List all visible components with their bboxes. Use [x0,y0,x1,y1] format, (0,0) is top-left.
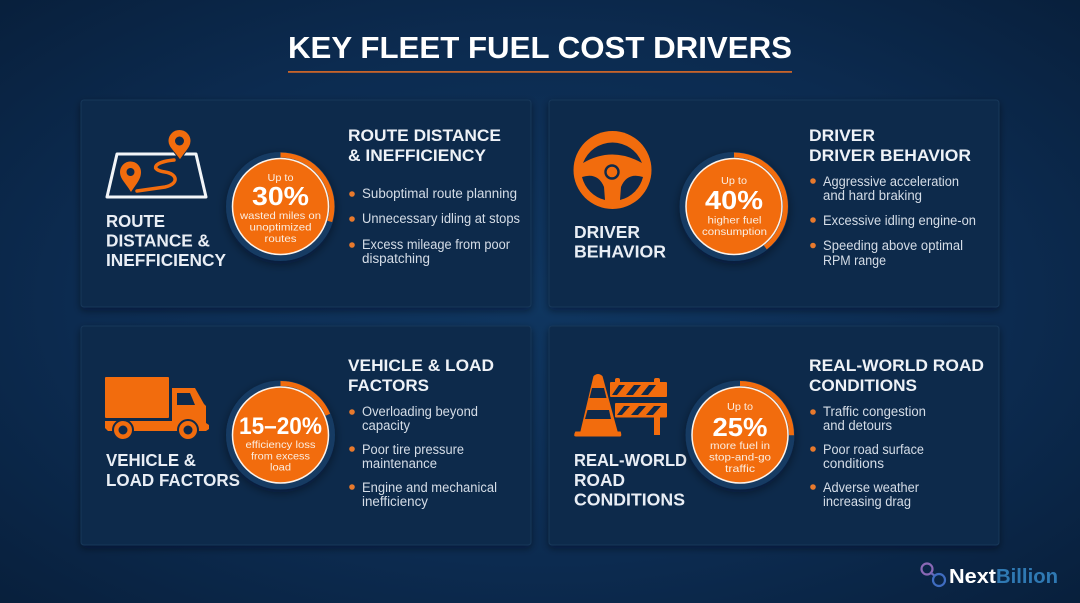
stat circle: 30% [226,152,335,261]
stat circle: 25%: 25% [712,412,768,442]
label: driver behavior: DRIVER [574,222,640,242]
bullet list: route distance: Excess mileage from poor [362,237,510,252]
icon: map with pins [107,130,206,197]
bullet list: driver behavior: Excessive idling engine-on [823,213,976,228]
heading: driver behavior: DRIVER [809,126,875,145]
bullet list: road conditions: Poor road surface [823,442,924,457]
label: road conditions: REAL-WORLD [574,450,687,470]
bullet list: driver behavior: Speeding above optimal [823,238,963,253]
panel: route distance [81,100,531,307]
logo: NextBillion: Next [949,566,996,588]
heading: road conditions: REAL-WORLD ROAD [809,356,984,375]
bullet list: route distance: dispatching [362,251,430,266]
bullet list: driver behavior: Aggressive acceleration [823,174,959,189]
stat circle: 15-20%: from excess [251,450,310,462]
panel: vehicle and load [81,326,531,545]
label: driver behavior [574,222,666,262]
label: route distance: DISTANCE & [106,230,210,250]
bullet list: vehicle and load: Poor tire pressure [362,442,464,457]
title underline [288,71,792,73]
heading: vehicle and load: FACTORS [348,376,429,395]
bullet list: road conditions: Traffic congestion [823,404,926,419]
stat circle: 15-20% [226,380,335,490]
heading: vehicle and load: VEHICLE & LOAD [348,356,494,375]
bullet list: route distance: Suboptimal route planning [362,186,517,201]
label: vehicle and load: VEHICLE & [106,450,196,470]
bullet list: route distance: Unnecessary idling at stops [362,211,520,226]
label: route distance: ROUTE [106,211,165,231]
icon: truck [105,377,209,440]
label: route distance: INEFFICIENCY [106,250,226,270]
label: road conditions [574,450,687,510]
bullet list: vehicle and load [349,404,497,509]
stat circle: 30%: Up to [268,172,294,184]
label: road conditions: CONDITIONS [574,490,685,510]
bullet list: driver behavior [810,174,976,268]
label: route distance [106,211,226,270]
logo: NextBillion: Billion [996,566,1058,588]
bullet list: road conditions: Adverse weather [823,480,919,495]
label: driver behavior: BEHAVIOR [574,242,666,262]
logo: NextBillion [922,564,1058,588]
bullet list: road conditions: and detours [823,418,892,433]
bullet list: route distance [349,186,520,266]
stat circle: 40%: consumption [702,226,767,238]
icon: steering wheel [574,131,652,209]
bullet list: road conditions [810,404,926,509]
label: road conditions: ROAD [574,470,625,490]
stat circle: 30%: 30% [252,181,309,211]
title: KEY FLEET FUEL COST DRIVERS [288,31,792,65]
heading: driver behavior: DRIVER BEHAVIOR [809,146,971,165]
icon: cone and barricade [574,374,667,437]
bullet list: driver behavior: and hard braking [823,188,922,203]
heading: vehicle and load [348,356,494,395]
bullet list: vehicle and load: Overloading beyond [362,404,478,419]
bullet list: vehicle and load: capacity [362,418,410,433]
bullet list: vehicle and load: maintenance [362,456,437,471]
heading: route distance [348,126,501,165]
bullet list: road conditions: conditions [823,456,884,471]
stat circle: 25% [686,380,794,490]
stat circle: 40%: Up to [721,175,747,187]
stat circle: 40% [680,152,788,261]
label: vehicle and load: LOAD FACTORS [106,470,240,490]
stat circle: 25%: Up to [727,401,753,413]
panel: road conditions [549,326,999,545]
stat circle: 25%: traffic [725,463,755,475]
stat circle: 30%: routes [264,233,296,245]
heading: route distance: & INEFFICIENCY [348,146,487,165]
stat circle: 40%: 40% [705,185,763,215]
stat circle: 25%: stop-and-go [709,452,771,464]
stat circle: 30%: wasted miles on [239,210,321,222]
stat circle: 15-20%: 15–20% [239,413,322,440]
heading: driver behavior [809,126,971,165]
bullet list: vehicle and load: inefficiency [362,494,428,509]
stat circle: 40%: higher fuel [708,214,762,226]
bullet list: road conditions: increasing drag [823,494,911,509]
stat circle: 25%: more fuel in [710,440,770,452]
heading: road conditions [809,356,984,395]
heading: road conditions: CONDITIONS [809,376,917,395]
panel: driver behavior [549,100,999,307]
stat circle: 15-20%: efficiency loss [246,439,316,451]
bullet list: vehicle and load: Engine and mechanical [362,480,497,495]
bullet list: driver behavior: RPM range [823,253,886,268]
stat circle: 15-20%: load [270,462,291,474]
heading: route distance: ROUTE DISTANCE [348,126,501,145]
label: vehicle and load [106,450,240,490]
stat circle: 30%: unoptimized [250,222,312,234]
